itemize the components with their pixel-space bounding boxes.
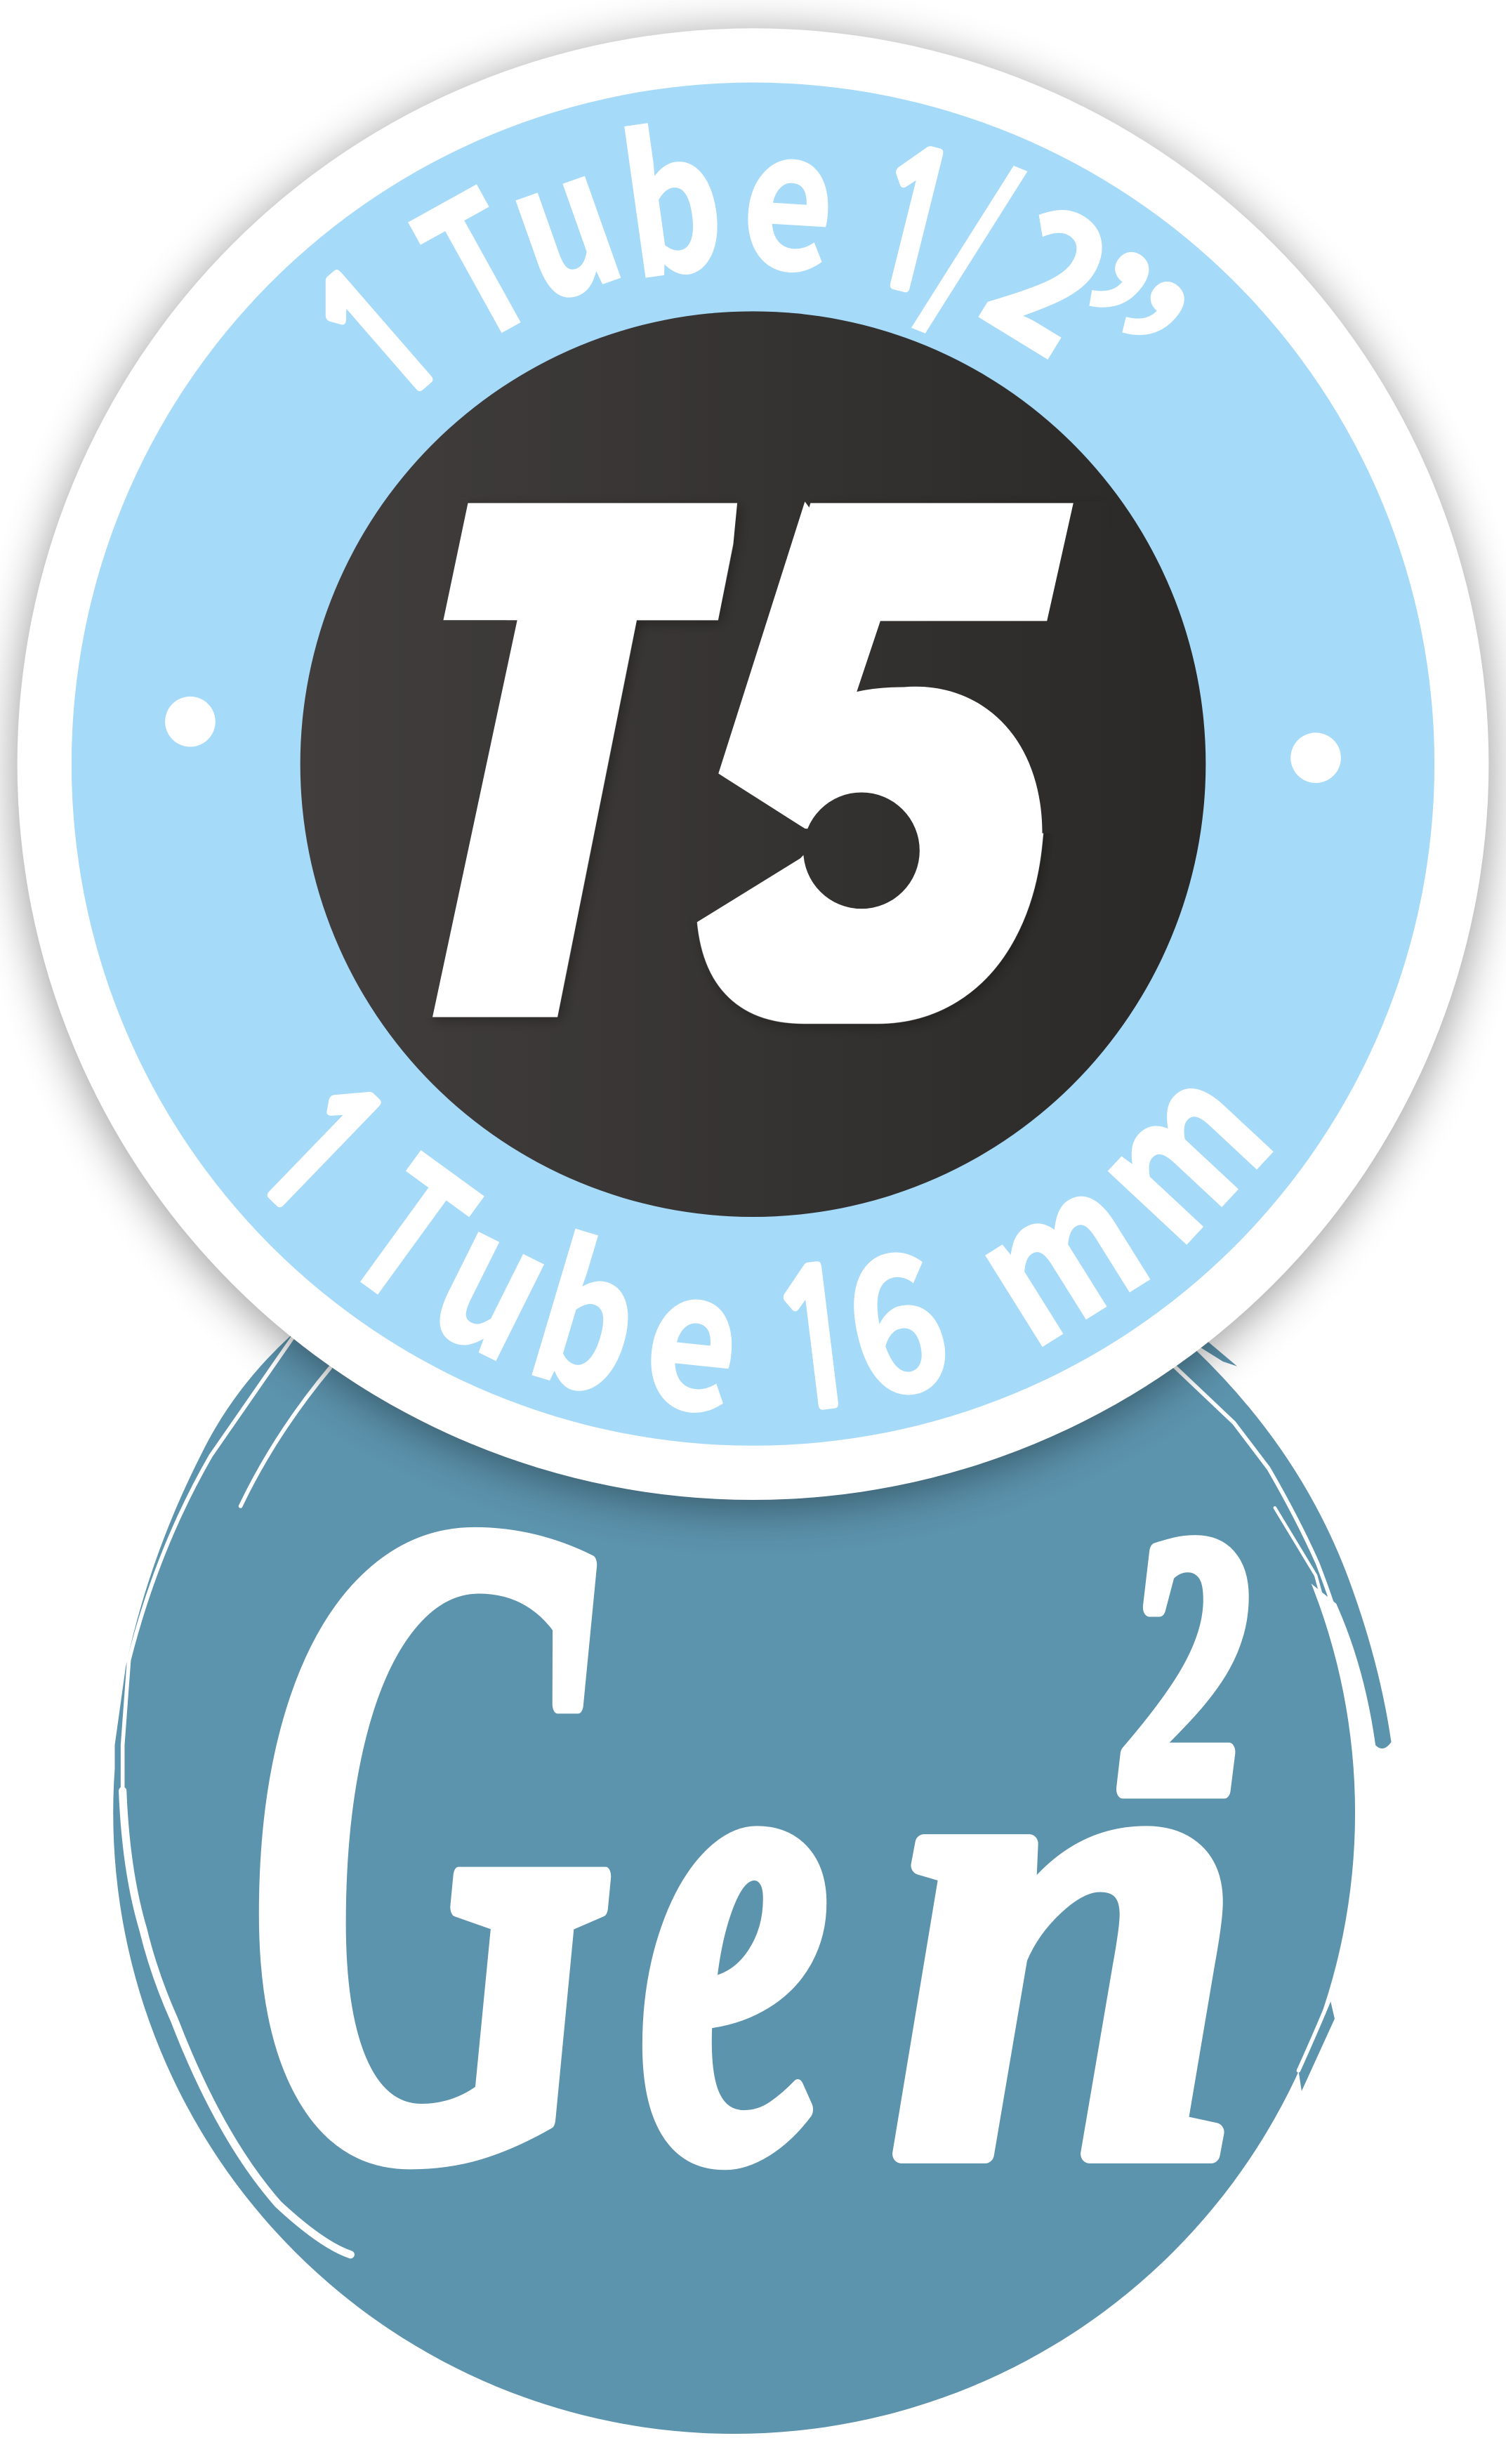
- outer white ring: [18, 28, 1488, 1500]
- bottom arc text: 1: [760, 1244, 874, 1440]
- T5 heading: 5: [705, 375, 1081, 1143]
- dark centre disc: [300, 311, 1206, 1217]
- bottom arc text: b: [506, 1161, 676, 1451]
- panel: T5 badge: [0, 0, 1506, 1509]
- top arc text: [0, 0, 1506, 1509]
- bottom arc text: e: [635, 1186, 753, 1468]
- bottom arc text: 1: [220, 1052, 416, 1250]
- Gen 2 lettering: 2: [1122, 1460, 1248, 1869]
- Gen 2 lettering: G: [247, 1324, 612, 2352]
- top arc text: 1: [284, 237, 475, 437]
- shadow of top badge: [18, 34, 1488, 1506]
- top arc text: 1: [845, 122, 979, 326]
- top arc text: /: [903, 92, 1055, 365]
- edge shaping of the T and 5: [401, 497, 1132, 1018]
- Gen 2 lettering: n: [888, 1552, 1247, 2300]
- brush circle fill: [113, 1192, 1392, 2434]
- top arc text: u: [469, 67, 649, 356]
- bottom arc text: T: [303, 1086, 532, 1357]
- top arc text: e: [736, 48, 843, 326]
- top arc text: 2: [945, 126, 1169, 409]
- top arc text: T: [368, 115, 574, 395]
- light blue disc: [72, 83, 1434, 1446]
- Gen 2 lettering: e: [638, 1552, 830, 2300]
- left dot: [165, 697, 216, 747]
- T5 heading: T: [390, 375, 715, 1143]
- bottom arc text: u: [397, 1127, 603, 1414]
- white brush strokes: [123, 1338, 1368, 2255]
- bottom arc text: m: [1018, 994, 1320, 1290]
- right dot: [1290, 732, 1341, 783]
- top arc text: ’: [1017, 214, 1246, 459]
- bottom arc text: [0, 0, 1506, 1509]
- bottom arc text: m: [916, 1088, 1188, 1399]
- panel: blue brush circle: [113, 1192, 1392, 2434]
- top arc text: b: [605, 48, 737, 333]
- top arc text: ’: [991, 183, 1208, 436]
- bottom arc text: 6: [814, 1168, 972, 1456]
